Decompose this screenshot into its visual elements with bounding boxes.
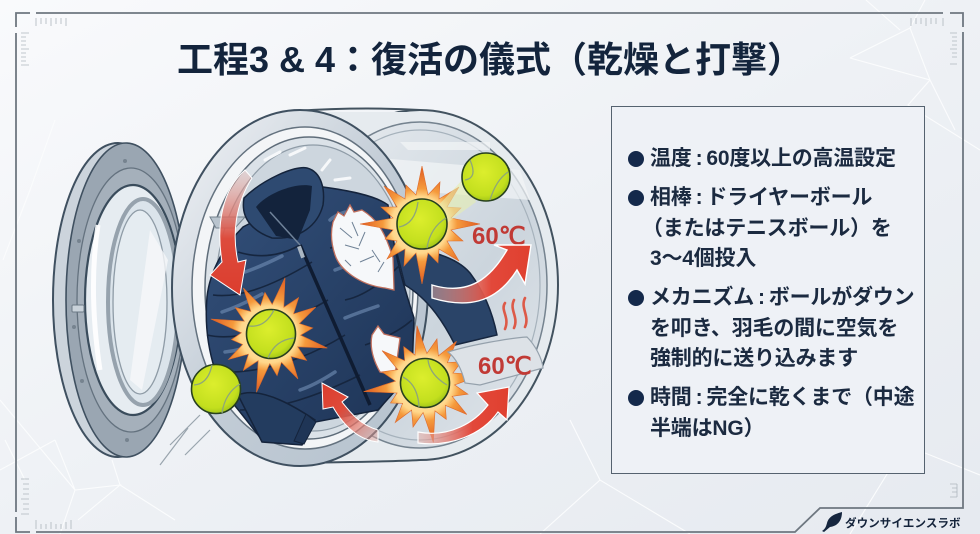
bullet: mechanism: メカニズム : ボールがダウン (650, 286, 914, 309)
zipper (300, 245, 370, 405)
bullet: time: 半端はNG） (650, 417, 764, 440)
torn jacket with white down (331, 205, 400, 375)
arrow: hot air lower right (418, 387, 509, 444)
arrow: rotation down left (210, 170, 252, 295)
jacket cuff (238, 393, 315, 445)
icon: tennis ball lower left (192, 364, 240, 414)
bullet: partner: 3～4個投入 (650, 247, 756, 270)
icon: feather (822, 512, 842, 532)
impact burst left (196, 263, 341, 406)
bullet: temperature: 温度 : 60度以上の高温設定 (650, 147, 896, 170)
bullet: time (628, 386, 914, 440)
heat waves icon (504, 298, 526, 329)
arrow: hot air up right (432, 245, 531, 303)
icon: tennis ball top right (462, 153, 510, 201)
heater vent (448, 337, 543, 385)
bullet: partner: 相棒 : ドライヤーボール (650, 186, 872, 209)
impact burst lower (356, 317, 491, 451)
icon: tennis ball impact top (397, 199, 447, 249)
title: 工程3 & 4：復活の儀式（乾燥と打撃） (177, 39, 803, 80)
jacket right sleeve (395, 245, 497, 345)
icon: open dryer door (53, 143, 186, 457)
panel: process details (611, 106, 925, 474)
label: 60 degrees: 60℃ (472, 223, 526, 250)
drum front ring (172, 110, 428, 466)
icon: tennis ball impact lower (400, 358, 450, 408)
bullet: partner (628, 186, 892, 270)
illustration: dryer drum with jacket and tennis balls (52, 108, 559, 467)
bullet: partner: （またはテニスボール）を (642, 217, 892, 240)
bullet: mechanism: 強制的に送り込みます (650, 347, 858, 370)
motion trail (432, 176, 476, 228)
drum body (282, 109, 558, 463)
bullet: mechanism (628, 286, 914, 370)
bullet: mechanism: を叩き、羽毛の間に空気を (650, 317, 898, 340)
arrow: rotation lower centre (322, 383, 378, 442)
icon: door hinge (172, 238, 187, 345)
jacket body (206, 187, 414, 442)
jacket (206, 168, 497, 445)
heater vent: 60℃ (478, 353, 532, 380)
footer logo (822, 512, 961, 532)
jacket collar (243, 168, 324, 238)
bullet: time: 時間 : 完全に乾くまで（中途 (650, 386, 914, 409)
impact burst top (360, 166, 480, 284)
icon: tennis ball impact left (246, 310, 296, 358)
motion lines lower left (160, 415, 210, 465)
brand name: ダウンサイエンスラボ (845, 518, 961, 530)
